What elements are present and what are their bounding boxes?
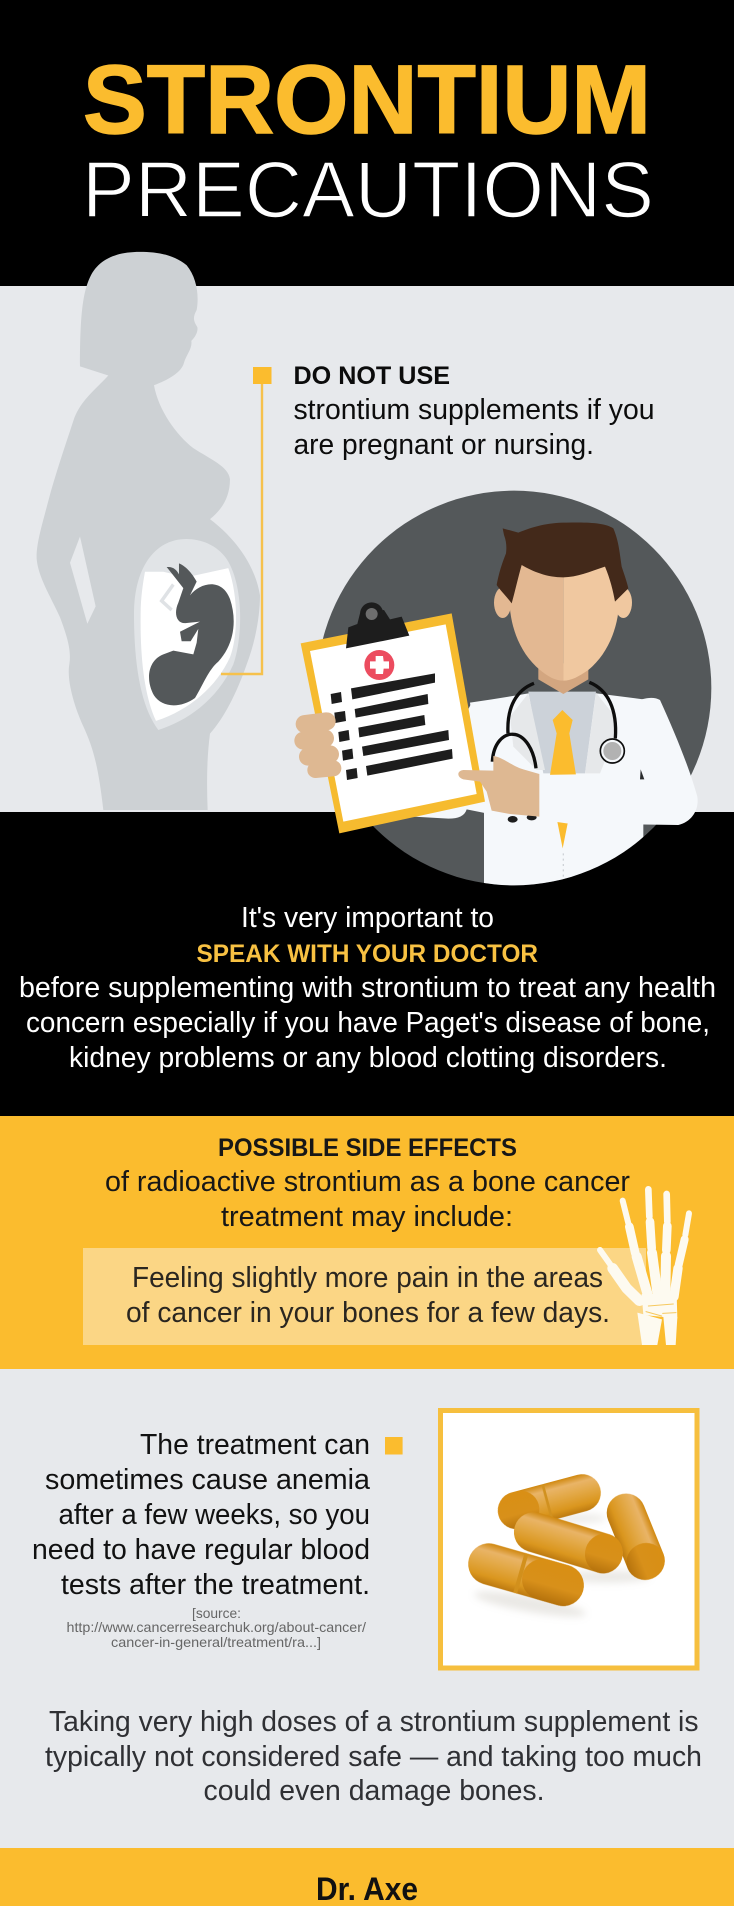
panel: footer (0, 1848, 734, 1906)
illustration: pregnant woman silhouette (37, 252, 260, 810)
source citation: http://www.cancerresearchuk.org/about-cancer/ (66, 1619, 366, 1635)
capsule front (463, 1538, 589, 1611)
text block: anemia warning: sometimes cause anemia (45, 1464, 371, 1496)
face right (563, 553, 619, 681)
text block: do not use (294, 362, 654, 461)
face left (509, 553, 563, 681)
panel: header (0, 0, 734, 286)
text block: possible side effects: of radioactive strontium as a bone cancer (105, 1166, 630, 1198)
tie tip (557, 818, 569, 848)
buttons (508, 814, 537, 823)
text block: speak with your doctor: kidney problems or any blood clotting disorders. (69, 1042, 667, 1074)
clip (346, 602, 409, 648)
bullet square (385, 1437, 403, 1454)
footer logo text: Dr. Axe (316, 1871, 418, 1906)
text block: high doses warning: typically not considered safe — and taking too much (45, 1741, 702, 1773)
source citation: cancer-in-general/treatment/ra...] (111, 1634, 321, 1650)
hair (497, 522, 628, 603)
capsule back (494, 1470, 605, 1533)
wrist and forearm bones (637, 1294, 677, 1345)
collar (510, 693, 545, 770)
holding hand fingers (303, 721, 333, 770)
capsule middle (509, 1507, 628, 1578)
photo: strontium capsules (440, 1410, 697, 1668)
source citation: [source: (192, 1605, 241, 1621)
title: STRONTIUM (83, 45, 651, 154)
collar right (585, 693, 615, 773)
title: PRECAUTIONS (82, 145, 654, 234)
title (82, 45, 654, 234)
stethoscope (492, 682, 624, 768)
capsule right (601, 1488, 670, 1586)
text block: possible side effects: POSSIBLE SIDE EFFECTS (218, 1134, 517, 1162)
coat buttons dotted (561, 853, 565, 877)
text block: possible side effects: treatment may include: (221, 1201, 513, 1233)
forearm (539, 698, 698, 825)
shirt (528, 692, 596, 773)
text block: do not use: DO NOT USE (294, 362, 450, 390)
text block: speak with your doctor: SPEAK WITH YOUR DOCTOR (196, 940, 538, 968)
callout connector (221, 367, 272, 674)
medical cross badge (364, 650, 394, 680)
side effect callout box: Feeling slightly more pain in the areas (132, 1262, 603, 1294)
text block: anemia warning: need to have regular blood (32, 1534, 370, 1566)
text block: possible side effects (105, 1134, 630, 1233)
coat torso (470, 693, 643, 893)
capsule shadows (473, 1514, 650, 1622)
checklist bars (331, 673, 453, 780)
left sleeve (413, 703, 493, 819)
arm gap (70, 537, 96, 624)
neck (538, 663, 588, 694)
illustration: doctor with clipboard (301, 491, 711, 893)
icon: hand bones (600, 1189, 689, 1345)
text block: speak with your doctor: It's very important to (241, 902, 494, 934)
panel: possible side effects (0, 1116, 734, 1369)
text block: anemia warning: The treatment can (140, 1429, 370, 1461)
pointing hand (458, 756, 539, 817)
amniotic space (141, 568, 236, 721)
text block: speak with your doctor: before supplementing with strontium to treat any health (19, 972, 716, 1004)
tie (550, 710, 576, 775)
text block: anemia warning: after a few weeks, so you (58, 1499, 370, 1531)
text block: anemia warning (32, 1429, 371, 1601)
text block: high doses warning: could even damage bones. (204, 1775, 544, 1807)
bullet square (253, 367, 272, 384)
panel: speak with your doctor (0, 812, 734, 1116)
side effect callout box (83, 1248, 646, 1345)
ears (494, 587, 632, 618)
dark circle (317, 491, 711, 885)
coat fold (640, 769, 644, 779)
text block: speak with your doctor: concern especially if you have Paget's disease of bone, (26, 1007, 710, 1039)
panel: pregnancy and doctor background (0, 286, 734, 812)
text block: do not use: strontium supplements if you (294, 394, 654, 426)
text block: speak with your doctor (19, 902, 716, 1074)
source citation (66, 1605, 366, 1650)
text block: anemia warning: tests after the treatment. (61, 1569, 370, 1601)
text block: high doses warning: Taking very high doses of a strontium supplement is (49, 1706, 698, 1738)
womb (134, 539, 240, 730)
fetus (149, 563, 234, 705)
clipboard (301, 602, 485, 833)
panel: anemia and high doses (0, 1369, 734, 1848)
side effect callout box: of cancer in your bones for a few days. (126, 1297, 610, 1329)
text block: do not use: are pregnant or nursing. (294, 429, 594, 461)
text block: high doses warning (45, 1706, 702, 1807)
umbilical cord (162, 585, 173, 610)
